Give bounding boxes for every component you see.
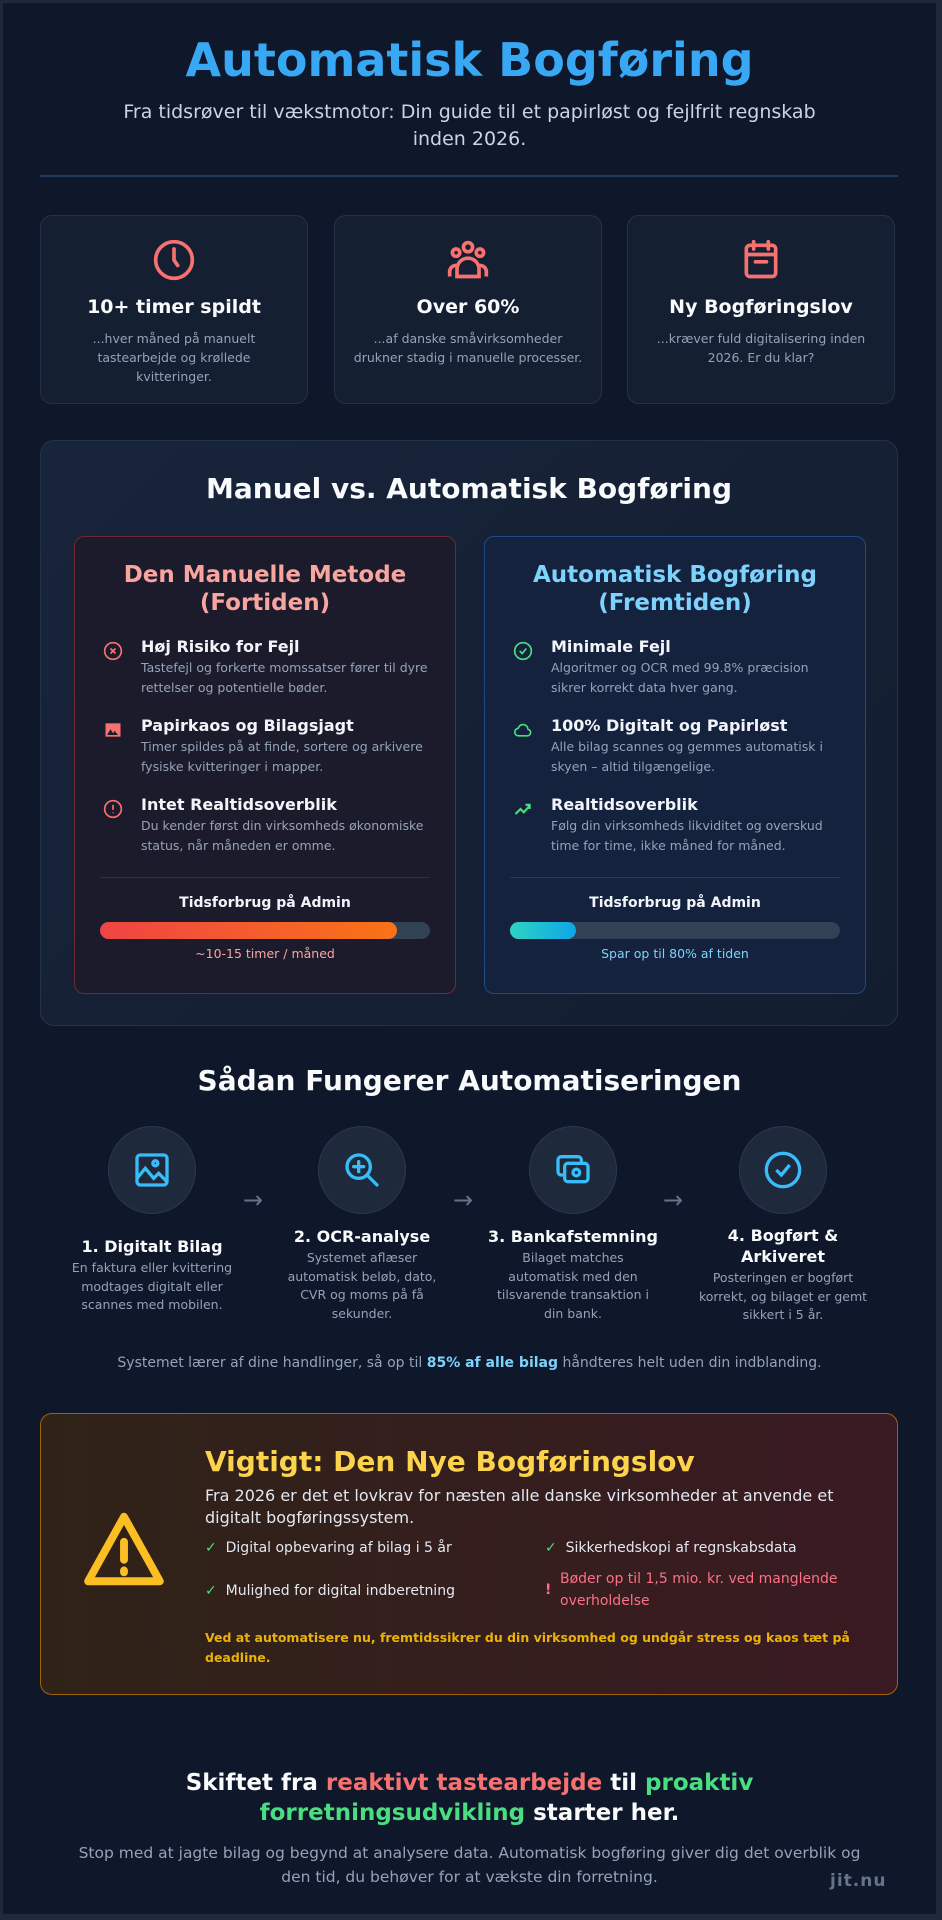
stat card: hours: ...hver måned på manuelt <box>93 331 255 346</box>
warning conclusion: deadline. <box>205 1650 271 1665</box>
warning conclusion <box>205 1630 850 1665</box>
arrow 3: → <box>663 1186 683 1214</box>
checklist: overholdelse <box>560 1593 650 1609</box>
panel: manual <box>74 536 456 994</box>
stat card: hours: tastearbejde og krøllede <box>97 350 250 365</box>
stat card: 60%: ...af danske småvirksomheder <box>374 331 562 346</box>
auto heading <box>533 562 817 616</box>
auto heading: Automatisk Bogføring <box>533 562 817 588</box>
warning heading: Vigtigt: Den Nye Bogføringslov <box>205 1445 695 1478</box>
step 3 text <box>488 1227 658 1320</box>
bar: auto time <box>510 894 840 961</box>
stat card: law: 2026. Er du klar? <box>708 350 814 365</box>
comparison heading: Manuel vs. Automatisk Bogføring <box>206 472 732 505</box>
step 4 text: 4. Bogført & <box>728 1226 838 1245</box>
panel: warning law <box>40 1413 898 1695</box>
stat card: hours <box>40 215 308 404</box>
step 2 circle icon <box>318 1126 406 1214</box>
item: digital <box>514 716 823 774</box>
icon: warning triangle <box>84 1512 164 1586</box>
step 2 text: sekunder. <box>332 1306 392 1320</box>
checklist: Bøder op til 1,5 mio. kr. ved manglende <box>560 1571 838 1587</box>
stat card: law: Ny Bogføringslov <box>669 296 853 318</box>
title: Automatisk Bogføring <box>186 33 754 87</box>
item: overview: Intet Realtidsoverblik <box>141 795 337 814</box>
warning conclusion: Ved at automatisere nu, fremtidssikrer du din virksomhed og undgår stress og kaos tæt på <box>205 1630 850 1645</box>
step 3 circle icon <box>529 1126 617 1214</box>
heading: how it works: Sådan Fungerer Automatiseringen <box>198 1064 741 1097</box>
stat card: 60% <box>334 215 602 404</box>
item: few errors <box>514 637 809 695</box>
step 2 text: CVR og moms på få <box>300 1287 424 1302</box>
stat card: hours: kvitteringer. <box>136 369 212 384</box>
stat card: 60%: drukner stadig i manuelle processer. <box>354 350 582 365</box>
step 3 text: din bank. <box>544 1306 602 1320</box>
note: Systemet lærer af dine handlinger, så op til 85% af alle bilag håndteres helt uden din indblanding. <box>117 1355 822 1371</box>
step 4 text: Arkiveret <box>741 1247 825 1266</box>
step 3 text: 3. Bankafstemning <box>488 1227 658 1246</box>
icon: clock <box>154 240 194 280</box>
step 1 text: 1. Digitalt Bilag <box>81 1237 223 1256</box>
footer heading: forretningsudvikling starter her. <box>260 1800 679 1826</box>
stat card: 60%: Over 60% <box>417 296 519 318</box>
item: overview: Du kender først din virksomheds økonomiske status, når måneden er omme. <box>141 818 423 853</box>
panel: comparison <box>40 440 898 1026</box>
manual heading: (Fortiden) <box>200 590 330 616</box>
step 2 text: automatisk beløb, dato, <box>288 1268 436 1284</box>
warning text: Fra 2026 er det et lovkrav for næsten alle danske virksomheder at anvende et digitalt bogføringssystem. <box>205 1486 833 1527</box>
footer heading <box>186 1770 753 1826</box>
step 2 text: Systemet aflæser <box>307 1250 417 1265</box>
step texts <box>72 1226 867 1322</box>
checklist <box>205 1539 838 1609</box>
icon: calendar <box>744 240 778 278</box>
bar: auto time: Tidsforbrug på Admin <box>589 895 761 911</box>
step 4 text: korrekt, og bilaget er gemt <box>699 1288 867 1304</box>
item: risk <box>104 637 428 695</box>
item: overview <box>104 795 423 853</box>
bar: auto time: Spar op til 80% af tiden <box>601 946 749 961</box>
icon: people <box>448 240 488 278</box>
item: digital: 100% Digitalt og Papirløst <box>551 716 787 735</box>
item: few errors: Algoritmer og OCR med 99.8% præcision sikrer korrekt data hver gang. <box>551 660 809 695</box>
step 1 text <box>72 1237 232 1312</box>
checklist: ✓ Sikkerhedskopi af regnskabsdata <box>545 1540 797 1556</box>
auto heading: (Fremtiden) <box>598 590 752 616</box>
item: realtime: Realtidsoverblik <box>551 795 698 814</box>
step 1 circle icon <box>108 1126 196 1214</box>
stat card: law: ...kræver fuld digitalisering inden <box>657 331 865 346</box>
footer text <box>79 1844 860 1886</box>
footer text: den tid, du behøver for at vækste din forretning. <box>281 1868 658 1886</box>
item: risk: Tastefejl og forkerte momssatser fører til dyre rettelser og potentielle bøder. <box>141 660 428 695</box>
manual heading <box>124 562 406 616</box>
checklist: ✓ Mulighed for digital indberetning <box>205 1583 455 1599</box>
step 2 text <box>288 1227 436 1320</box>
footer heading: Skiftet fra reaktivt tastearbejde til proaktiv <box>186 1770 753 1796</box>
step 4 text <box>699 1226 867 1322</box>
item: risk: Høj Risiko for Fejl <box>141 637 300 656</box>
step 2 text: 2. OCR-analyse <box>294 1227 430 1246</box>
step 3 text: automatisk med den <box>508 1268 638 1284</box>
bar: manual time: Tidsforbrug på Admin <box>179 895 351 911</box>
checklist: ! <box>545 1582 551 1598</box>
step 1 text: scannes med mobilen. <box>81 1297 223 1312</box>
arrow 1: → <box>243 1186 263 1214</box>
step 3 text: tilsvarende transaktion i <box>497 1287 649 1302</box>
item: realtime: Følg din virksomheds likviditet og overskud time for time, ikke måned for måned. <box>551 818 823 853</box>
footer text: Stop med at jagte bilag og begynd at analysere data. Automatisk bogføring giver dig det overblik og <box>79 1844 860 1862</box>
stat card: hours: 10+ timer spildt <box>87 296 261 318</box>
bar: manual time: ~10-15 timer / måned <box>195 946 335 961</box>
item: paper <box>106 716 423 774</box>
item: realtime <box>514 795 823 853</box>
step 4 text: Posteringen er bogført <box>713 1270 853 1285</box>
checklist: ✓ Digital opbevaring af bilag i 5 år <box>205 1540 452 1556</box>
item: few errors: Minimale Fejl <box>551 637 671 656</box>
brand: jit.nu <box>830 1871 886 1891</box>
manual heading: Den Manuelle Metode <box>124 562 406 588</box>
panel: automatic <box>484 536 866 994</box>
item: paper: Timer spildes på at finde, sortere og arkivere fysiske kvitteringer i mapper. <box>141 739 423 774</box>
step 3 text: Bilaget matches <box>522 1250 624 1265</box>
step 1 text: modtages digitalt eller <box>81 1278 223 1294</box>
bar: manual time <box>100 894 430 961</box>
item: digital: Alle bilag scannes og gemmes automatisk i skyen – altid tilgængelige. <box>551 739 823 774</box>
step 4 text: sikkert i 5 år. <box>743 1307 823 1322</box>
step 1 text: En faktura eller kvittering <box>72 1260 232 1275</box>
stat card: law <box>627 215 895 404</box>
step 4 circle icon <box>739 1126 827 1214</box>
item: paper: Papirkaos og Bilagsjagt <box>141 716 354 735</box>
arrow 2: → <box>453 1186 473 1214</box>
subtitle: Fra tidsrøver til vækstmotor: Din guide til et papirløst og fejlfrit regnskab inden 2026. <box>123 101 816 150</box>
